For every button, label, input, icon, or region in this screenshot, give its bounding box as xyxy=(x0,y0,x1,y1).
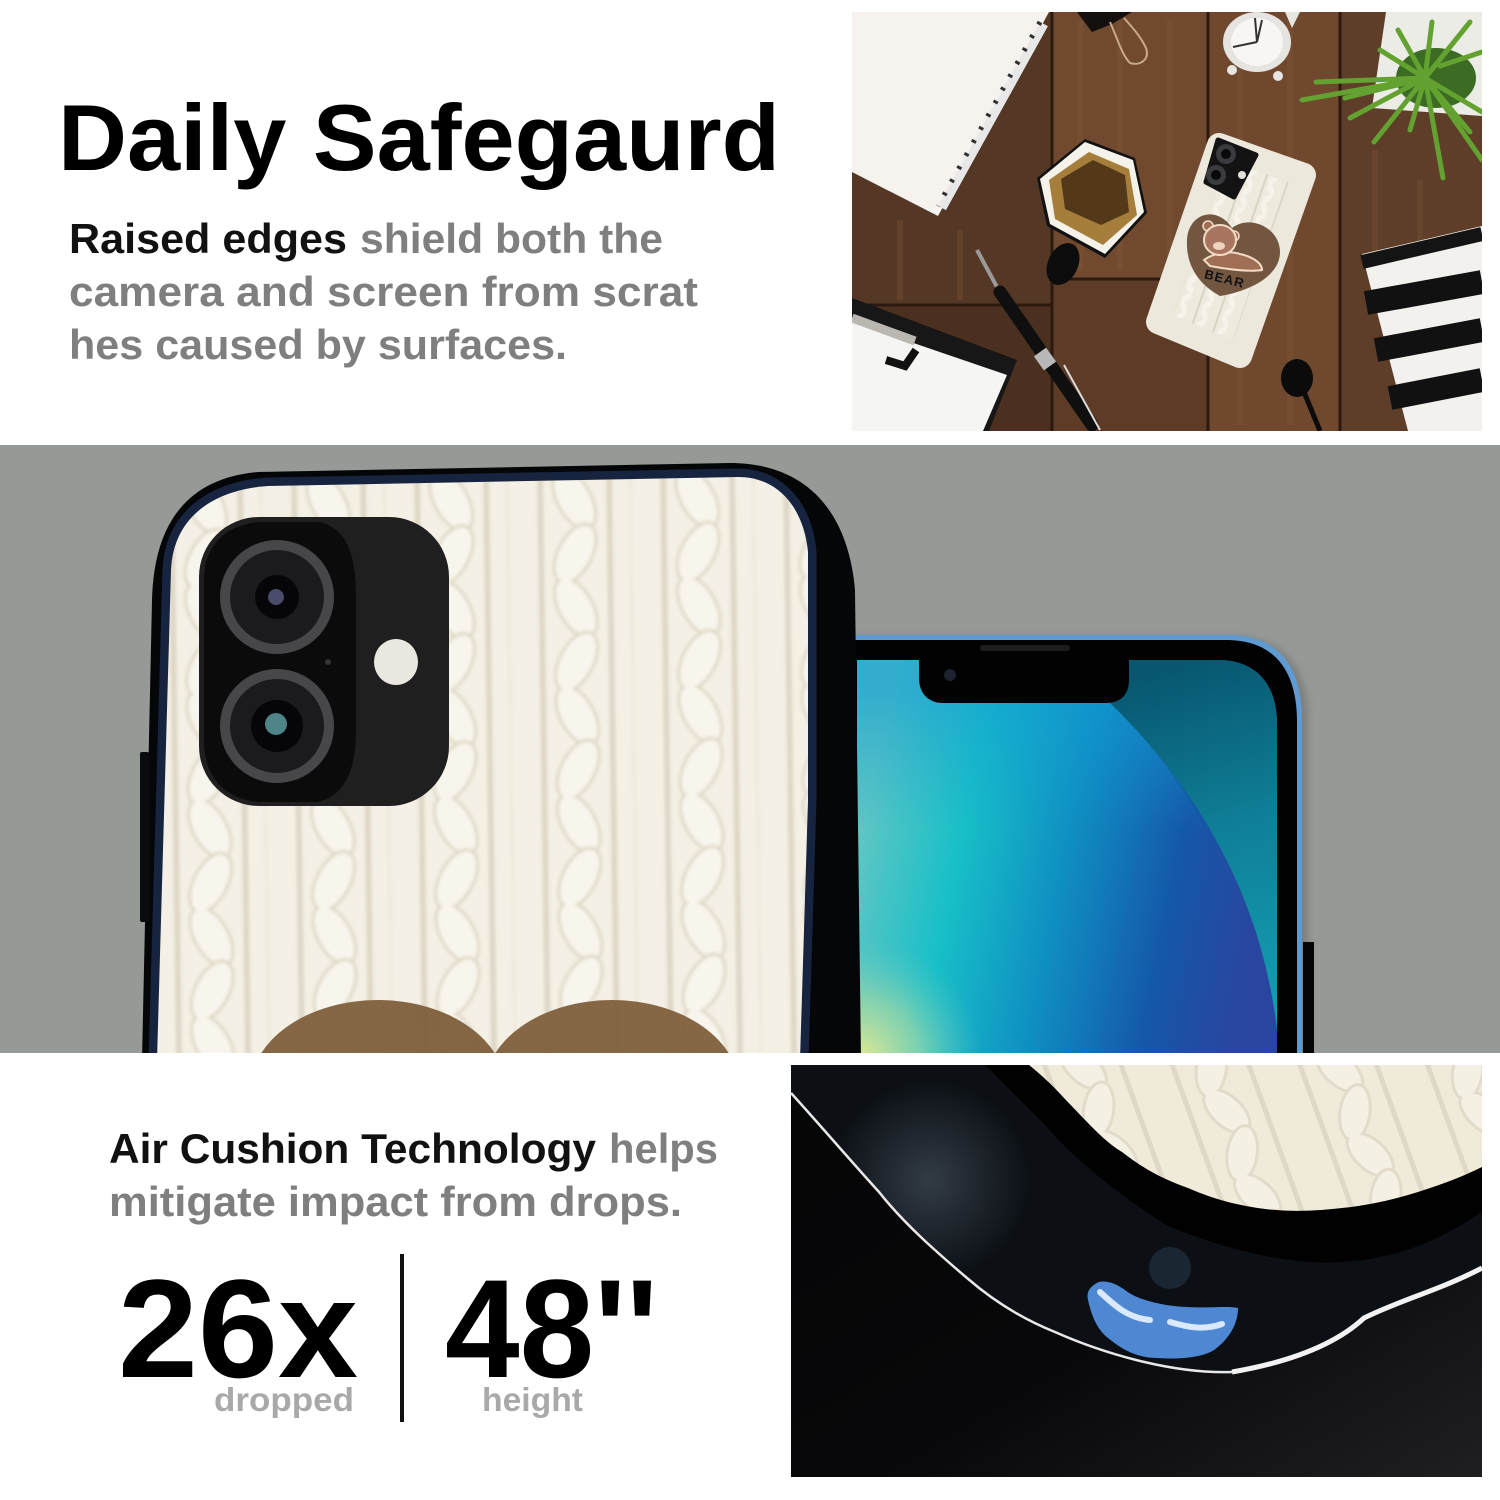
text block: air cushion: helps xyxy=(609,1125,718,1172)
text block: air cushion: Air Cushion Technology xyxy=(109,1125,597,1172)
black rim xyxy=(985,1065,1482,1263)
earbud xyxy=(1281,359,1320,431)
phone shadow xyxy=(1238,635,1310,1053)
photo: case edge close-up with water drop xyxy=(791,1065,1482,1477)
stat: 48 inches height: height xyxy=(482,1381,583,1418)
dark bumper xyxy=(791,1065,1298,1358)
coffee cup xyxy=(1037,139,1147,290)
stat: 48 inches height: 48'' xyxy=(445,1250,658,1407)
text block: raised edges: shield both the xyxy=(360,215,663,262)
text block: raised edges: Raised edges xyxy=(69,215,347,262)
text block: raised edges xyxy=(69,215,698,368)
phone frame xyxy=(845,635,1302,1060)
lower lens xyxy=(220,669,334,783)
white edge highlight xyxy=(791,1093,1232,1372)
text block: air cushion xyxy=(109,1125,718,1225)
alarm clock xyxy=(1223,12,1300,81)
small phone with heart sticker xyxy=(1158,140,1304,356)
navy bumper edge xyxy=(157,477,808,1060)
stat: 26x dropped: dropped xyxy=(214,1381,354,1418)
middle band: phone close-up xyxy=(0,445,1500,1053)
text block: air cushion: mitigate impact from drops. xyxy=(109,1178,682,1225)
small phone with heart sticker: BEAR xyxy=(1203,266,1246,291)
pen xyxy=(977,250,1100,430)
side button xyxy=(140,752,149,922)
knit area xyxy=(1029,1065,1482,1211)
notch xyxy=(919,660,1129,703)
clipboard xyxy=(852,298,1017,431)
front phone xyxy=(845,635,1314,1060)
stat: 26x dropped: 26x xyxy=(118,1250,358,1407)
side button xyxy=(1303,942,1314,1057)
heart sticker xyxy=(1187,214,1280,296)
case frame xyxy=(142,463,861,1060)
text block: raised edges: hes caused by surfaces. xyxy=(69,321,567,368)
big phone case xyxy=(140,463,861,1053)
water drop xyxy=(1087,1247,1238,1359)
title: Daily Safegaurd xyxy=(58,85,780,190)
text block: raised edges: camera and screen from scrat xyxy=(69,268,698,315)
bear xyxy=(1203,221,1262,271)
heart xyxy=(261,1000,729,1053)
small camera xyxy=(1206,140,1256,197)
plant xyxy=(1302,12,1482,178)
photo: desk flat lay with phone xyxy=(852,12,1482,431)
notebook xyxy=(852,12,1049,216)
camera module xyxy=(199,517,449,806)
screen xyxy=(857,660,1277,1060)
binder clip xyxy=(1077,12,1147,64)
knit back xyxy=(157,477,808,1053)
upper lens xyxy=(220,540,334,654)
flash xyxy=(374,639,418,685)
striped notebook xyxy=(1362,226,1482,431)
